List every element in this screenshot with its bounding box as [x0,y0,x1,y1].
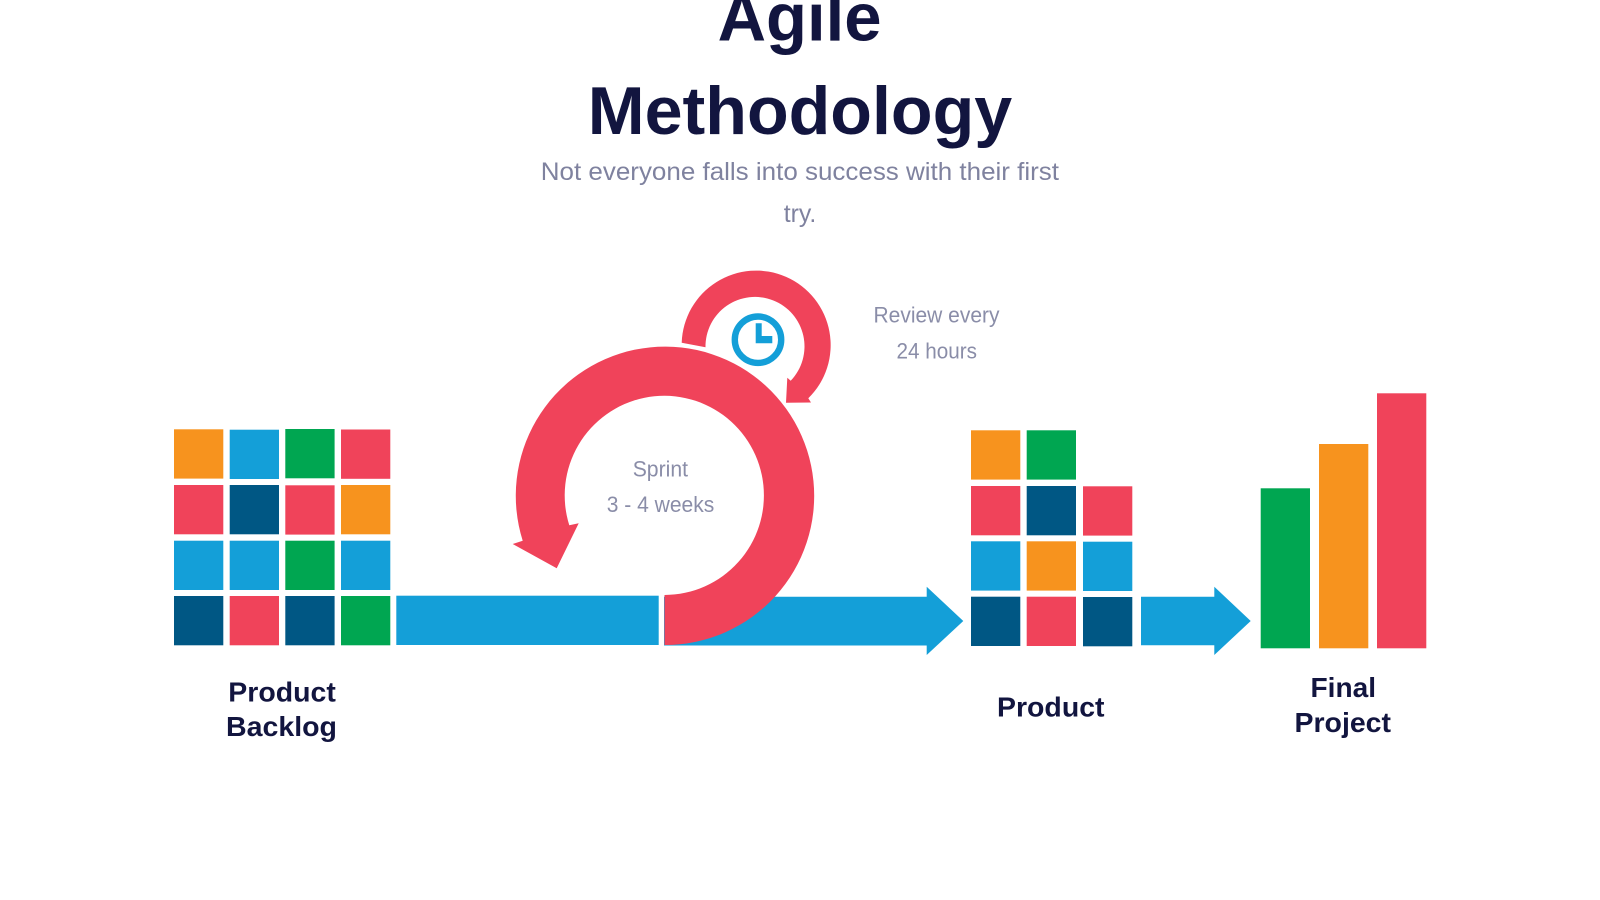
arrow: backlog bar [396,596,659,645]
label: final project: Final [1310,672,1376,703]
label: product backlog [226,677,337,742]
icon: clock [735,316,781,363]
bar chart: final project [1261,393,1426,648]
text: review every 24 hours: Review every [874,303,1000,328]
label: final project [1294,672,1391,738]
text: review every 24 hours [874,303,1000,363]
panel: product backlog grid [174,429,390,645]
arrow: sprint to product [664,587,963,655]
icon: sprint loop arrow [513,347,814,645]
text: sprint duration: Sprint [633,457,688,482]
subtitle [541,158,1059,228]
arrow: product to final project [1141,587,1251,655]
label: product: Product [997,692,1104,723]
subtitle: Not everyone falls into success with their first [541,158,1059,186]
label: final project: Project [1294,707,1391,738]
text: review every 24 hours: 24 hours [896,338,977,363]
panel: product grid [971,430,1132,646]
title: Methodology [588,73,1012,149]
text: sprint duration: 3 - 4 weeks [607,492,714,517]
label: product backlog: Backlog [226,711,337,742]
text: sprint duration [607,457,714,517]
icon: daily review loop arrow [682,271,831,403]
title [588,0,1012,149]
subtitle: try. [784,200,816,228]
label: product backlog: Product [228,677,336,708]
